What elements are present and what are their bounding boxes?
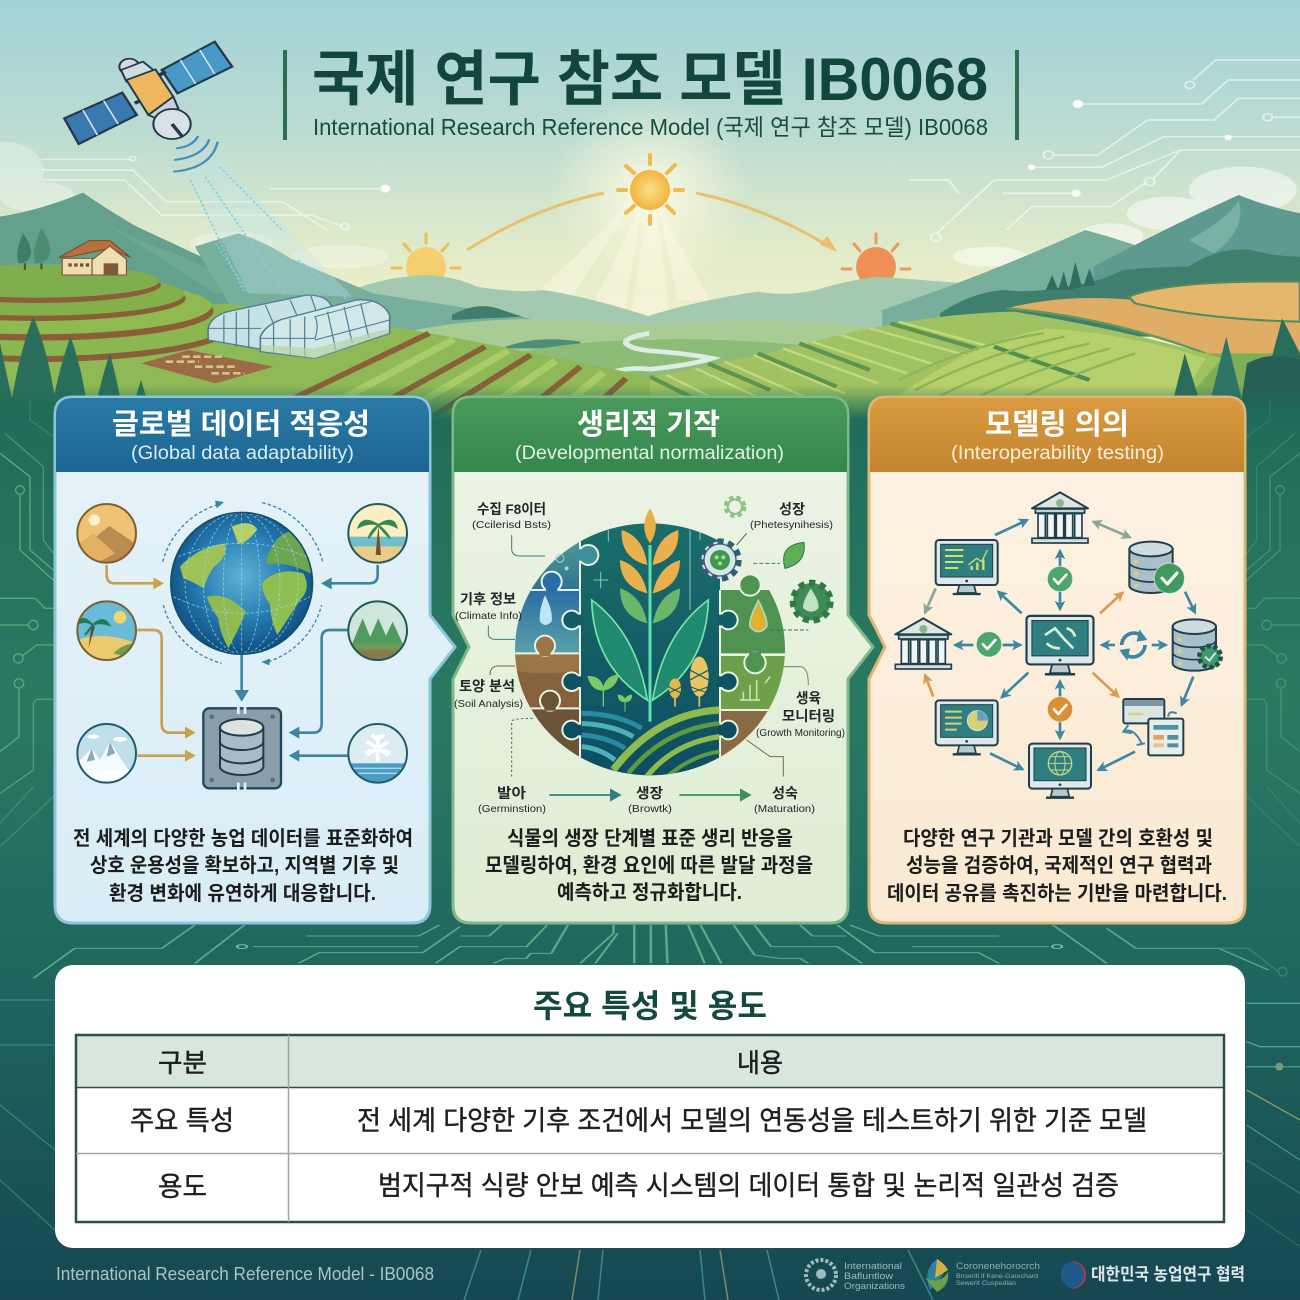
globe <box>171 513 313 654</box>
sun: sunset <box>842 234 910 287</box>
fade into circuit board <box>0 385 1300 420</box>
monitor: chart <box>936 540 998 594</box>
puzzle labels <box>454 501 845 815</box>
panel: interoperability testing <box>869 397 1245 923</box>
database: verified <box>1129 542 1185 594</box>
leaf icon <box>784 542 804 568</box>
small gear <box>726 498 744 515</box>
connector arrows <box>107 565 378 756</box>
puzzle labels: 성숙 <box>772 785 798 801</box>
main title: 국제 연구 참조 모델 IB0068 <box>312 46 988 113</box>
logo: cooperation: Sewerit Cuspedian <box>956 1280 1016 1287</box>
rolling fields centre and right <box>415 282 1300 420</box>
landscape illustration <box>0 60 1300 420</box>
puzzle labels: 생장 <box>636 785 663 801</box>
clouds and circuit lines in sky <box>0 60 1300 268</box>
logo: Korea <box>1061 1261 1245 1289</box>
logo: international organizations: Organizations <box>844 1281 905 1292</box>
puzzle labels: (Growth Monitoring) <box>756 727 845 739</box>
panel 3 subheading: (Interoperability testing) <box>951 443 1164 464</box>
puzzle labels: 기후 정보 <box>460 591 516 607</box>
sun: midday <box>618 155 683 224</box>
monitor: pie chart <box>936 700 998 754</box>
database: gear <box>1173 619 1221 671</box>
puzzle labels: (Soil Analysis) <box>454 698 523 710</box>
satellite icon <box>64 42 232 172</box>
panel 1 card <box>55 397 455 923</box>
panel 1 body text: 상호 운용성을 확보하고, 지역별 기후 및 <box>90 854 399 877</box>
puzzle labels: 모니터링 <box>782 708 835 724</box>
terraced hillside <box>0 264 650 420</box>
panel 3 body text <box>887 827 1227 905</box>
monitor: central hub <box>1027 616 1093 674</box>
subtitle: International Research Reference Model (국제 연구 참조 모델) IB0068 <box>313 114 988 140</box>
logo: Korea: 대한민국 농업연구 협력 <box>1091 1265 1245 1284</box>
biome: beach <box>77 601 140 663</box>
panel 3 heading: 모델링 의의 <box>985 408 1129 441</box>
header row text: 구분 <box>158 1048 207 1078</box>
footer caption: International Research Reference Model - IB0068 <box>56 1264 434 1284</box>
house and trees <box>17 228 131 275</box>
satellite beam <box>189 157 352 300</box>
row: uses: 범지구적 식량 안보 예측 시스템의 데이터 통합 및 논리적 일관성 검증 <box>378 1171 1119 1201</box>
panel 3 body text: 데이터 공유를 촉진하는 기반을 마련합니다. <box>887 882 1227 905</box>
card background <box>55 965 1245 1248</box>
footer <box>56 1259 1245 1292</box>
arrow arcs between suns <box>467 193 836 251</box>
panel 2 body text <box>485 827 813 904</box>
document windows <box>1123 699 1183 755</box>
panel 3 card <box>869 397 1245 923</box>
panel 2 header <box>454 398 847 472</box>
panel: global data adaptability <box>55 397 455 923</box>
sun glow and beams <box>540 95 750 320</box>
biome: snow mountains <box>77 724 137 783</box>
dashed orbit <box>163 501 323 665</box>
header row text: 내용 <box>737 1048 783 1078</box>
server <box>203 707 281 790</box>
header row text <box>158 1048 783 1078</box>
puzzle labels: 생육 <box>796 690 821 706</box>
panel 2 heading: 생리적 기작 <box>577 408 720 441</box>
row: uses: 용도 <box>158 1172 207 1202</box>
sync icon <box>1119 629 1147 661</box>
panel 1 subheading: (Global data adaptability) <box>131 443 354 464</box>
panel 3 body text: 다양한 연구 기관과 모델 간의 호환성 및 <box>903 827 1213 850</box>
row: main features: 주요 특성 <box>130 1106 234 1136</box>
checks <box>976 566 1073 657</box>
monitor: globe <box>1029 744 1091 798</box>
puzzle labels: (Germinstion) <box>478 803 546 815</box>
biome: desert <box>77 504 136 567</box>
upper left details <box>540 554 569 625</box>
greenhouses <box>207 295 390 358</box>
puzzle labels: 수집 F8이터 <box>477 501 546 517</box>
panel 1 body text: 환경 변화에 유연하게 대응합니다. <box>109 882 376 905</box>
logo: international organizations <box>806 1260 905 1292</box>
logo: international organizations: International <box>844 1261 902 1272</box>
puzzle labels: (Phetesynihesis) <box>750 519 833 531</box>
panel 1 body text: 전 세계의 다양한 농업 데이터를 표준화하여 <box>73 827 413 850</box>
growth bars <box>740 677 770 700</box>
panel 1 body text <box>73 827 413 905</box>
panel 1 header <box>56 398 429 472</box>
biome: forest <box>347 601 410 663</box>
field stripes <box>582 710 719 777</box>
panel 1 diagram <box>77 501 410 790</box>
panel 2 card <box>453 397 873 923</box>
puzzle labels: 발아 <box>497 785 526 801</box>
biome: palm coast <box>347 504 410 563</box>
table heading: 주요 특성 및 용도 <box>533 988 767 1024</box>
puzzle labels: (Ccilerisd Bsts) <box>472 519 551 531</box>
mountains <box>0 193 1300 367</box>
crop plot <box>141 350 274 383</box>
title block <box>285 46 1017 140</box>
panel 2 body text: 모델링하여, 환경 요인에 따른 발달 과정을 <box>485 854 813 877</box>
gold drop <box>750 601 767 632</box>
biome: snow and sea <box>347 724 410 787</box>
logo: cooperation: Coronenehorocrch <box>956 1261 1040 1272</box>
puzzle labels: (Maturation) <box>754 803 815 815</box>
panel 2 body text: 예측하고 정규화합니다. <box>557 881 742 904</box>
logo: cooperation: Bnseriti if Kene-Garechard <box>956 1273 1038 1280</box>
dark trees bottom left <box>0 317 153 420</box>
panel 3 header <box>870 398 1244 472</box>
institutions <box>895 492 1088 669</box>
panel 1 heading: 글로벌 데이터 적응성 <box>112 408 370 441</box>
puzzle tabs <box>535 545 766 739</box>
puzzle labels: (Browtk) <box>628 803 672 815</box>
network arrows <box>925 520 1195 770</box>
timeline arrow: growth to maturation <box>679 788 752 802</box>
panel 3 body text: 성능을 검증하여, 국제적인 연구 협력과 <box>906 854 1212 877</box>
logo: cooperation <box>925 1259 1040 1292</box>
plant <box>588 508 709 722</box>
panel 2 body text: 식물의 생장 단계별 표준 생리 반응을 <box>507 827 793 850</box>
title bars <box>285 50 1017 140</box>
arrow heads <box>153 577 332 762</box>
puzzle labels: (Climate Info) <box>455 610 522 622</box>
check: orange <box>1047 697 1073 722</box>
puzzle labels: 성장 <box>779 501 805 517</box>
logo: international organizations: Bafluntlow <box>844 1271 893 1282</box>
row: main features: 전 세계 다양한 기후 조건에서 모델의 연동성을 테스트하기 위한 기준 모델 <box>357 1106 1147 1136</box>
panel 2 subheading: (Developmental normalization) <box>515 443 784 464</box>
panel: developmental normalization <box>453 397 873 923</box>
network diagram <box>895 492 1221 798</box>
circuit traces around panels <box>0 400 1300 1300</box>
timeline arrow: germination to growth <box>549 788 622 802</box>
leader lines <box>488 533 808 777</box>
gear: photosynthesis <box>701 541 739 579</box>
gear: water <box>793 583 830 620</box>
puzzle labels: 토양 분석 <box>459 678 515 694</box>
sun: sunrise <box>392 234 460 287</box>
table card: key features and uses <box>55 965 1245 1248</box>
table grid <box>76 1035 1224 1222</box>
puzzle plant diagram <box>488 498 830 802</box>
puzzle disc <box>513 520 787 780</box>
